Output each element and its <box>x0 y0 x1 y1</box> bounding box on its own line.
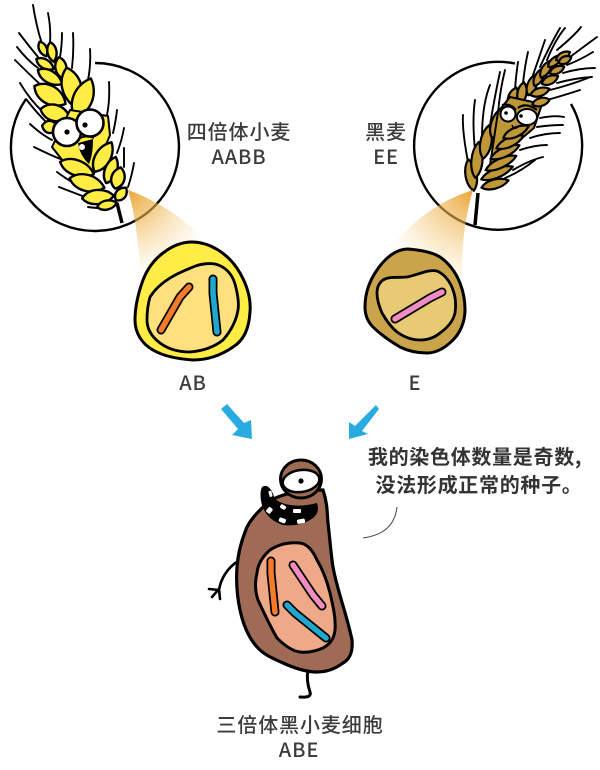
chromosome: orange <box>161 287 189 330</box>
arrow: right <box>349 405 379 439</box>
label: triploid wheat cell <box>216 709 384 763</box>
icon: wheat mouth <box>78 136 94 164</box>
label: rye: 黑麦 <box>365 116 407 145</box>
label: triploid wheat cell: ABE <box>279 734 319 763</box>
callout: speech text: 没法形成正常的种子。 <box>376 469 582 498</box>
arm <box>209 561 238 599</box>
highlight cone: right <box>388 190 473 280</box>
icon: brown rye character <box>463 27 597 225</box>
callout leader line <box>363 507 397 538</box>
teeth <box>266 491 305 524</box>
icon: triploid cell character <box>209 460 352 697</box>
callout: speech text <box>368 441 582 498</box>
eye <box>281 468 321 494</box>
label: tetraploid wheat: AABB <box>211 141 267 170</box>
cell: AB gamete <box>135 242 250 360</box>
head <box>280 460 322 498</box>
arrow: left <box>221 404 252 439</box>
chromosome: pink <box>293 565 322 606</box>
icon: rye eyes <box>500 105 537 128</box>
body <box>237 490 352 672</box>
icon: yellow wheat character <box>15 5 134 223</box>
circle: rye magnifier <box>414 62 582 230</box>
label: triploid wheat cell: 三倍体黑小麦细胞 <box>216 709 384 738</box>
label: tetraploid wheat: 四倍体小麦 <box>187 116 291 145</box>
leg <box>300 670 310 697</box>
label: tetraploid wheat <box>187 116 291 170</box>
nucleus <box>256 543 335 652</box>
chromosome: orange <box>271 561 275 612</box>
chromosome: blue <box>213 279 217 332</box>
cell: E gamete <box>365 249 465 353</box>
circle: tetraploid wheat magnifier <box>11 63 179 231</box>
label: E: E <box>409 367 421 396</box>
label: AB: AB <box>179 367 207 396</box>
chromosome: blue <box>287 605 326 638</box>
highlight cone: left <box>128 190 205 272</box>
chromosome: pink <box>395 292 442 319</box>
icon: wheat eyes <box>53 110 104 146</box>
label: rye <box>365 116 407 170</box>
callout: speech text: 我的染色体数量是奇数, <box>368 441 582 470</box>
label: rye: EE <box>373 141 399 170</box>
mouth <box>260 486 318 525</box>
